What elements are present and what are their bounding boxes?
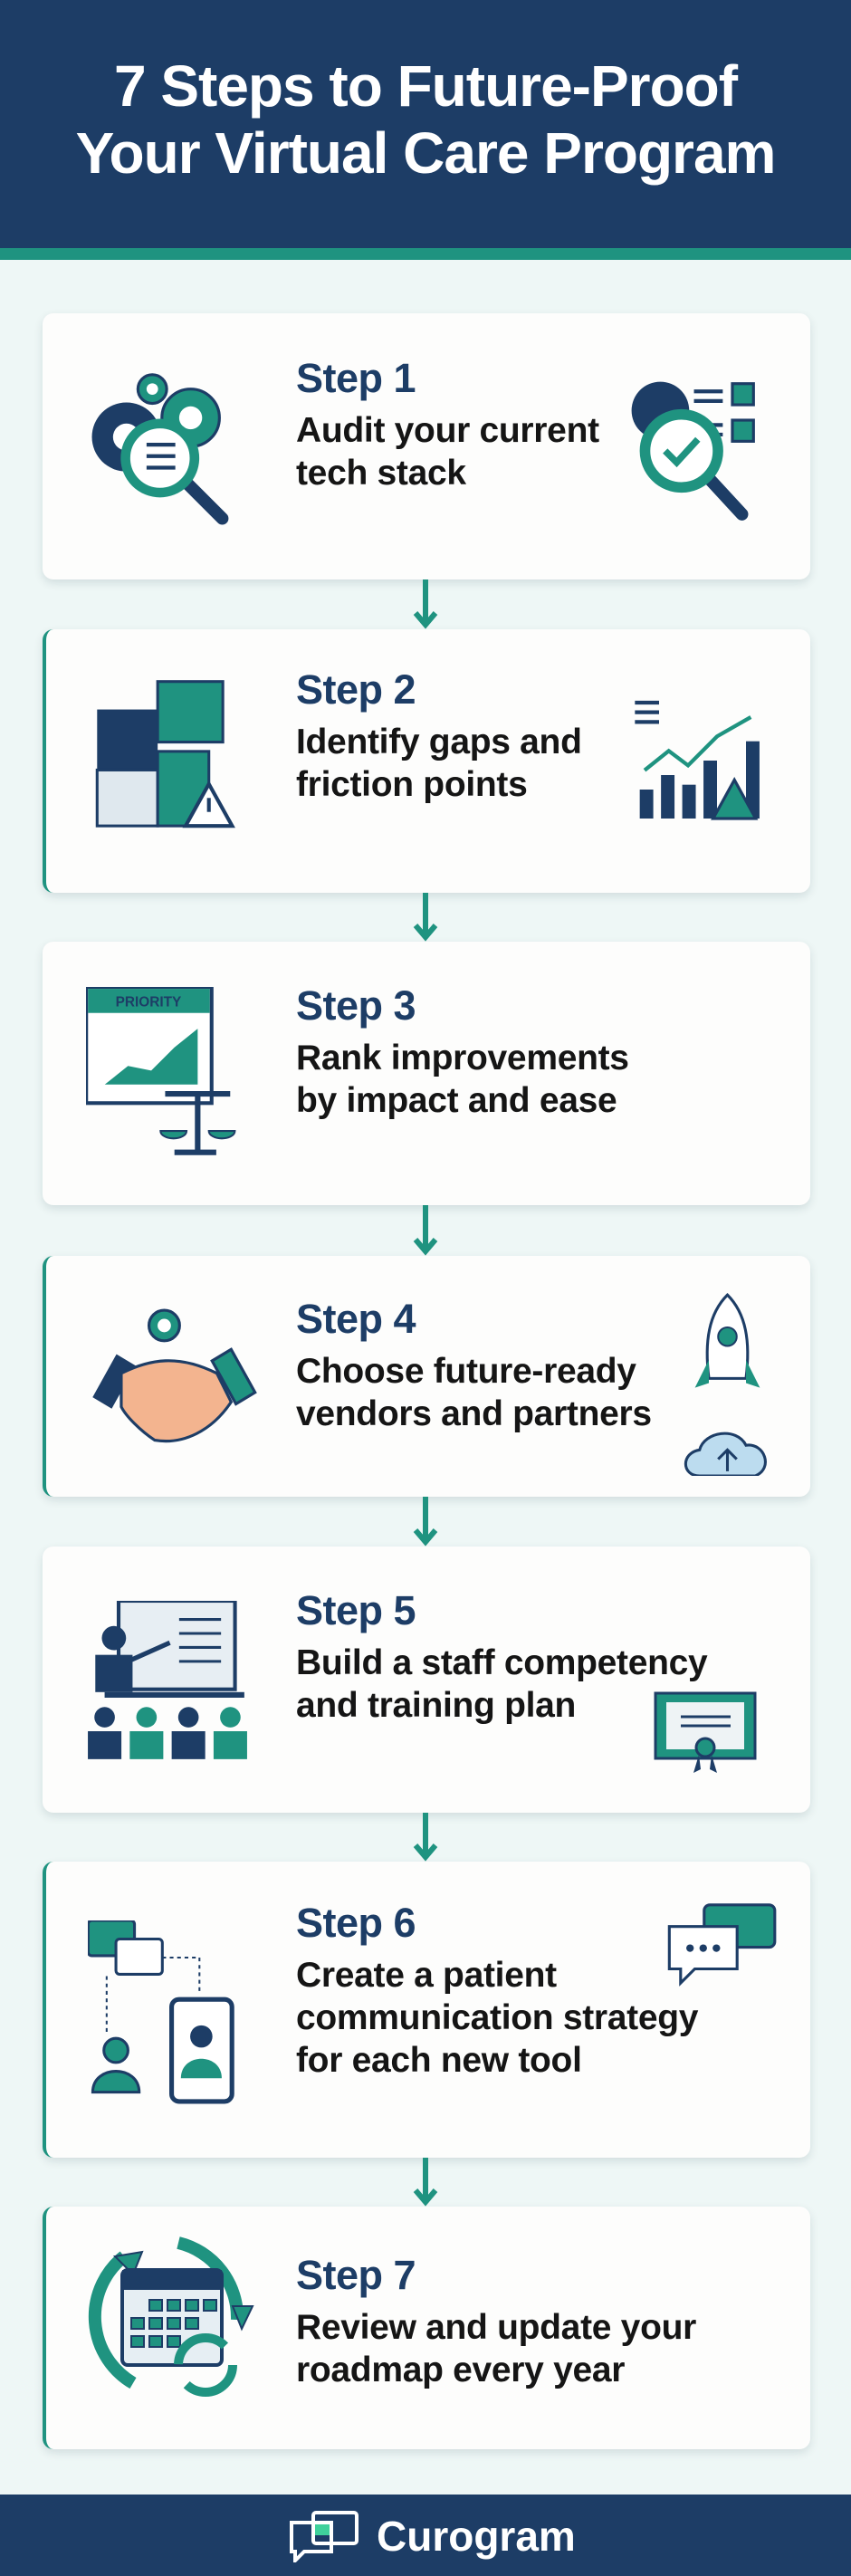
icon: magnifier checklist (632, 382, 755, 521)
text: step 7: Review and update your (296, 2308, 696, 2347)
logo: Curogram (290, 2511, 576, 2562)
text: step 1: Audit your current (296, 411, 599, 450)
text: step 6: Create a patient (296, 1956, 557, 1995)
text: step 7: roadmap every year (296, 2351, 625, 2389)
card: step 7 (43, 2207, 810, 2449)
text: step 5: Build a staff competency (296, 1643, 707, 1682)
arrow 2 (413, 893, 438, 942)
card: step 2 (43, 629, 810, 893)
text: step 1 (296, 355, 599, 493)
text: step 4 (296, 1296, 652, 1433)
text: step 6: communication strategy (296, 1998, 698, 2037)
icon: priority board with scale (86, 987, 235, 1155)
text: step 2: friction points (296, 765, 527, 804)
card: step 4 (43, 1256, 810, 1497)
text: step 4: Step 4 (296, 1296, 416, 1342)
text: step 3: Rank improvements (296, 1039, 629, 1077)
text: step 2: Identify gaps and (296, 723, 582, 761)
text: step 6: Step 6 (296, 1900, 416, 1946)
card: step 5 (43, 1547, 810, 1813)
text: step 3: Step 3 (296, 982, 416, 1029)
text: step 3: by impact and ease (296, 1081, 617, 1120)
icon: chart with warning (635, 701, 760, 820)
icon: certificate (654, 1691, 757, 1773)
text: step 4: vendors and partners (296, 1394, 652, 1433)
icon: gears with magnifier (92, 373, 228, 525)
text: step 5: and training plan (296, 1686, 576, 1725)
logo: Curogram: Curogram (377, 2513, 576, 2560)
text: step 2: Step 2 (296, 666, 416, 713)
icon: handshake with gear (92, 1309, 257, 1443)
icon: chat bubbles logo (290, 2511, 359, 2562)
icon: chat, person and phone (88, 1920, 234, 2104)
header (0, 0, 851, 248)
text: step 7: Step 7 (296, 2252, 416, 2298)
text: step 7 (296, 2252, 696, 2389)
arrow 4 (413, 1497, 438, 1547)
card: step 6 (43, 1862, 810, 2158)
text: step 3 (296, 982, 629, 1120)
text: step 5 (296, 1587, 708, 1725)
arrow 1 (413, 579, 438, 628)
title: Your Virtual Care Program (76, 120, 775, 186)
icon: priority board with scale: PRIORITY (116, 995, 181, 1010)
text: step 2 (296, 666, 582, 804)
footer (0, 2495, 851, 2576)
text: step 6 (296, 1900, 699, 2080)
text: step 4: Choose future-ready (296, 1352, 636, 1391)
card: step 3 (43, 942, 810, 1205)
title (76, 53, 775, 186)
card: step 1 (43, 313, 810, 579)
text: step 5: Step 5 (296, 1587, 416, 1633)
icon: calendar with cycle arrows (89, 2236, 253, 2397)
text: step 1: Step 1 (296, 355, 416, 401)
arrow 5 (413, 1813, 438, 1862)
icon: puzzle with warning (96, 680, 235, 828)
icon: rocket and cloud (684, 1293, 767, 1476)
icon: trainer with audience (88, 1601, 247, 1759)
arrow 3 (413, 1205, 438, 1255)
text: step 6: for each new tool (296, 2041, 582, 2080)
title: 7 Steps to Future-Proof (114, 53, 737, 119)
text: step 1: tech stack (296, 454, 466, 493)
icon: speech bubbles (668, 1903, 777, 1987)
arrow 6 (413, 2158, 438, 2206)
